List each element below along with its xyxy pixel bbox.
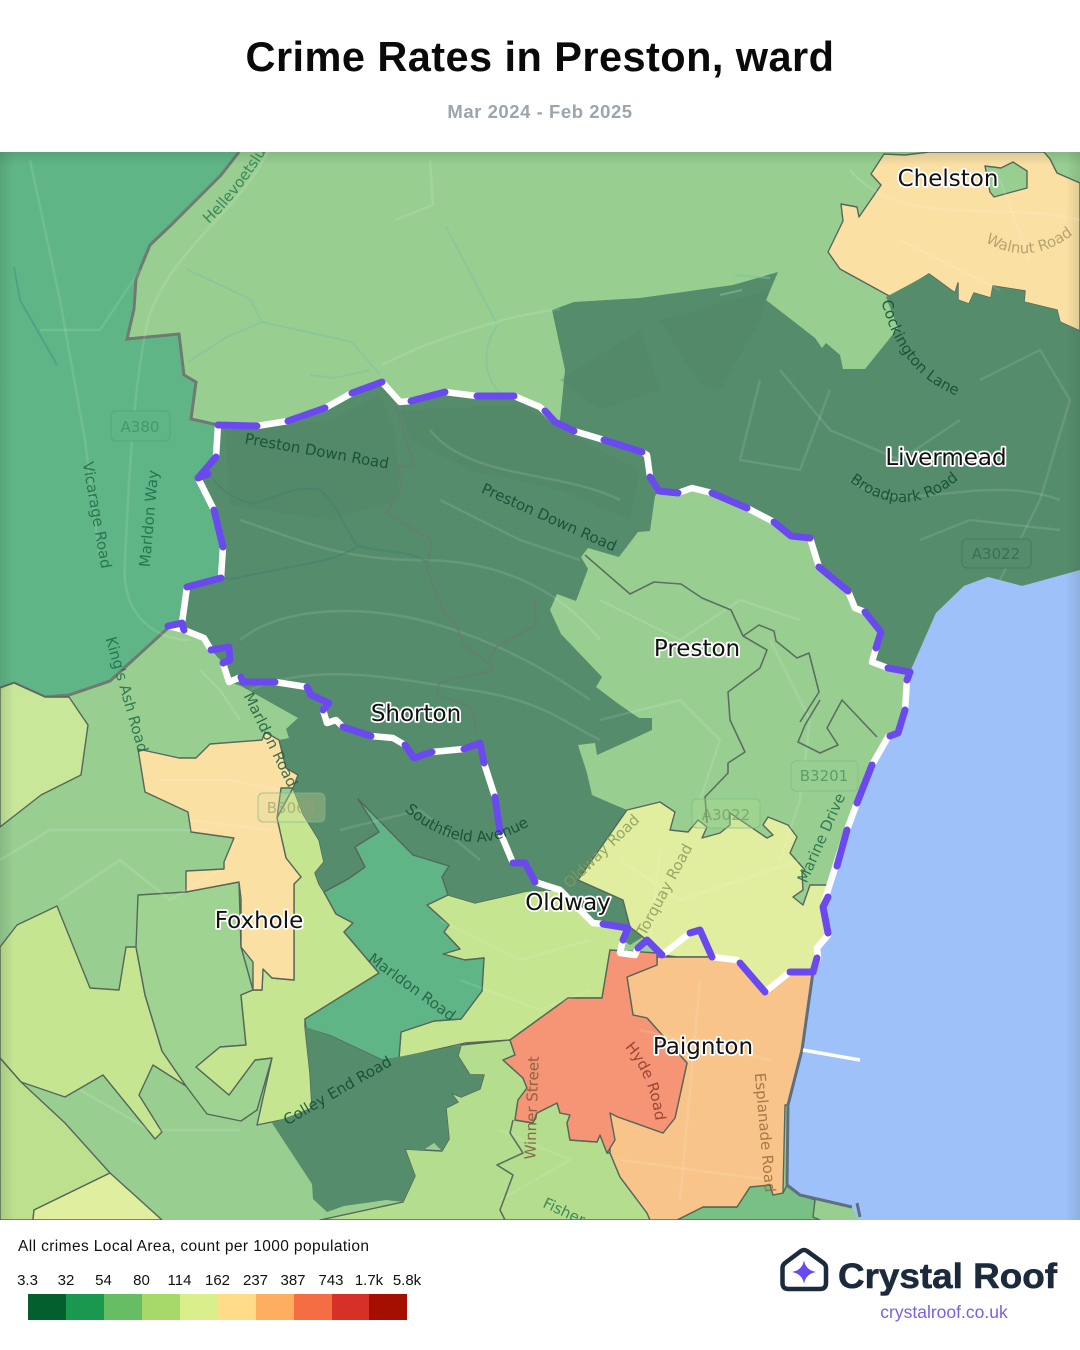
legend labels: 1.7k (355, 1272, 384, 1289)
legend labels: 743 (318, 1272, 344, 1289)
road shield: A3022 south: A3022 (702, 806, 750, 824)
coast edge and jetty (787, 972, 860, 1217)
region: bottom centre green (320, 1040, 650, 1220)
road labels: Vicarage Road (79, 460, 115, 570)
place labels: Oldway (525, 890, 611, 916)
road labels: Preston Down Road (479, 480, 619, 555)
road labels: Broadpark Road (850, 471, 958, 504)
place labels: Livermead (885, 445, 1007, 471)
footer: legend and logo (17, 1238, 1058, 1322)
ward boundary: purple dashes (168, 382, 910, 992)
legend labels: 237 (243, 1272, 268, 1289)
road labels: King's Ash Road (102, 635, 152, 755)
region: Paignton orange (610, 957, 813, 1220)
region: south-west pale green (0, 906, 186, 1139)
road shield: A3022 east: A3022 (972, 545, 1020, 563)
legend title: All crimes Local Area, count per 1000 population (18, 1238, 369, 1255)
road shield: B3060 (258, 793, 325, 822)
region: central yellow green (196, 788, 379, 1125)
road labels: Cockington Lane (882, 300, 958, 395)
region: Livermead dark green (552, 272, 1080, 672)
road shield: A380: A380 (121, 418, 159, 436)
region: Preston south yellow (578, 802, 828, 992)
legend labels: 3.3 (17, 1272, 38, 1289)
legend labels: 54 (95, 1272, 112, 1289)
road labels: Winner Street (521, 1056, 543, 1160)
map: crime rates choropleth (0, 152, 1080, 1220)
website link: crystalroof.co.uk (880, 1302, 1008, 1322)
logo wordmark: Crystal Roof (838, 1257, 1057, 1296)
region: bottom right green (677, 1185, 820, 1220)
base area: light green wards (0, 152, 1080, 1220)
streams (14, 267, 427, 579)
road network (0, 152, 1080, 1200)
region: left pale green (0, 683, 88, 827)
title: Crime Rates in Preston, ward (246, 33, 834, 80)
region: lower left green (0, 1058, 110, 1220)
road shield: A380 (111, 411, 170, 441)
pier (803, 1050, 860, 1060)
region: Oldway south-west yellow green (399, 890, 628, 1058)
region: Foxhole cream (138, 732, 301, 990)
legend labels: 162 (205, 1272, 230, 1289)
region: Shorton and Livermead darker patches (225, 290, 770, 520)
ward internal boundaries (386, 403, 877, 1220)
road labels: Marldon Road (365, 949, 459, 1025)
road labels: Oldway Road (560, 811, 643, 892)
region: Chelston cream (828, 152, 1080, 331)
legend labels: 114 (168, 1272, 191, 1289)
edge shading (0, 152, 1080, 1220)
place labels: Foxhole (215, 908, 303, 934)
sea (787, 570, 1080, 1220)
legend colour scale (28, 1294, 407, 1320)
road labels: Marldon Way (136, 469, 162, 568)
road labels: Preston Down Road (243, 430, 390, 473)
road shield: A3022 east (962, 539, 1031, 568)
subtitle: date range: Mar 2024 - Feb 2025 (447, 101, 633, 122)
place labels: Chelston (898, 166, 998, 192)
place labels: Shorton (371, 701, 461, 727)
region: Chelston green pocket (985, 162, 1027, 197)
legend labels: 80 (133, 1272, 150, 1289)
road labels: Torquay Road (632, 841, 696, 939)
road shield: A3022 south (692, 799, 760, 828)
place labels: Paignton (653, 1034, 753, 1060)
ward boundary: white base (168, 382, 910, 992)
place labels (215, 166, 1007, 1060)
road labels: Colley End Road (280, 1052, 395, 1129)
road shield: B3201 (791, 761, 858, 791)
region: Marldon Road medium green (305, 799, 484, 1060)
road shield: B3060: B3060 (267, 799, 315, 817)
road labels: Hyde Road (626, 1042, 666, 1120)
region: Colley End dark green (272, 1027, 484, 1212)
road labels: Marine Drive (794, 790, 849, 885)
legend labels: 387 (280, 1272, 306, 1289)
place labels: Preston (654, 636, 740, 662)
region: west-centre outline (136, 882, 272, 1121)
road labels: Marldon Road (240, 690, 301, 790)
road labels: Southfield Avenue (406, 804, 528, 842)
road labels: Esplanade Road (751, 1072, 779, 1193)
region: west medium green (0, 152, 239, 697)
legend labels: 32 (58, 1272, 74, 1289)
streams: north fields (186, 227, 770, 392)
logo icon: house with sparkle (782, 1250, 826, 1289)
region: Paignton red (503, 950, 687, 1153)
region: bottom left pale yellow (33, 1173, 162, 1220)
legend labels: 5.8k (393, 1272, 422, 1289)
region: Shorton dark green (182, 382, 659, 945)
legend labels (17, 1272, 422, 1289)
road shield: B3201: B3201 (800, 767, 848, 785)
west region grey boundary (0, 152, 239, 697)
road labels: Walnut Road (988, 226, 1072, 254)
